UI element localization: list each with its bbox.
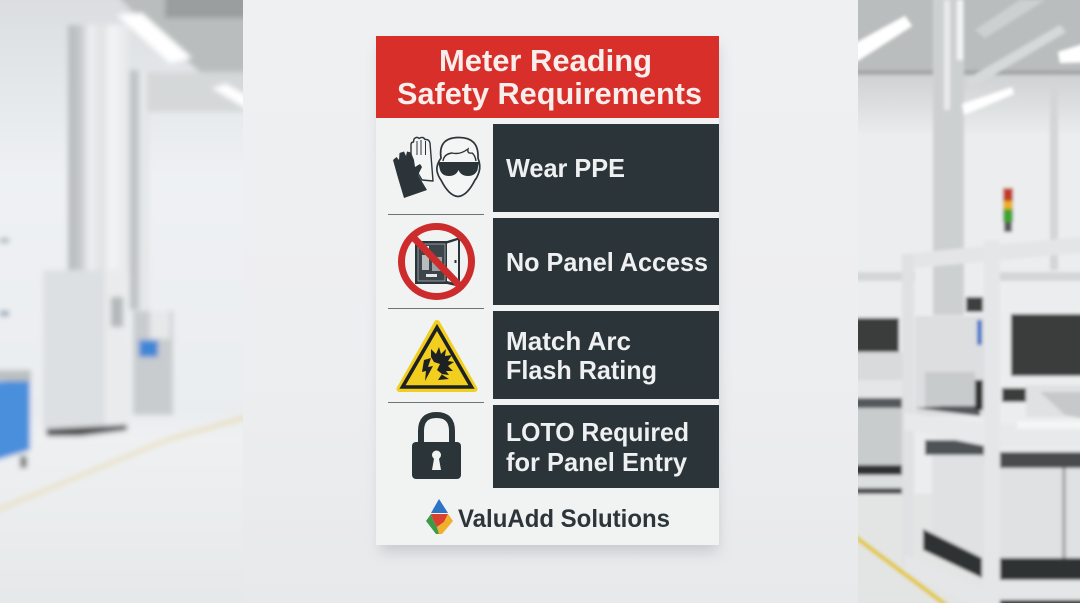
label panel: LOTO Required for Panel Entry: for Panel Entry [506, 447, 688, 477]
background: blurred factory right [850, 0, 1080, 603]
background: blurred factory left [0, 0, 243, 514]
label panel: No Panel Access [493, 218, 719, 305]
logo: ValuAdd Solutions: ValuAdd Solutions [458, 505, 670, 533]
wall panel behind the sign [243, 0, 858, 603]
title banner: Safety Requirements [397, 76, 702, 111]
label panel: Wear PPE [493, 124, 719, 212]
divider [388, 402, 484, 403]
logo: ValuAdd Solutions [426, 499, 670, 534]
icon: prohibited electrical panel [402, 226, 472, 296]
label panel: LOTO Required for Panel Entry: LOTO Required [506, 417, 689, 447]
icon: face with goggles [437, 137, 480, 196]
icon: arc flash warning triangle [400, 323, 474, 389]
title banner: Meter Reading [439, 43, 652, 78]
icon: logo mark [426, 499, 453, 534]
row 3: arc flash [388, 311, 719, 403]
label panel: Match Arc Flash Rating [493, 311, 719, 399]
divider [388, 214, 484, 215]
row 4: LOTO [412, 405, 719, 488]
title banner [376, 36, 719, 118]
icon: padlock [412, 415, 461, 479]
label panel: No Panel Access: No Panel Access [506, 247, 708, 277]
safety sign [376, 36, 719, 545]
divider [388, 308, 484, 309]
row 1: wear PPE [388, 124, 719, 215]
label panel: Match Arc Flash Rating: Match Arc [506, 326, 631, 356]
icon: gloves [393, 137, 433, 198]
label panel: Match Arc Flash Rating: Flash Rating [506, 355, 657, 385]
sign shadow [380, 46, 718, 552]
label panel: Wear PPE: Wear PPE [506, 153, 625, 183]
row 2: no panel access [388, 218, 719, 309]
label panel: LOTO Required for Panel Entry [493, 405, 719, 488]
